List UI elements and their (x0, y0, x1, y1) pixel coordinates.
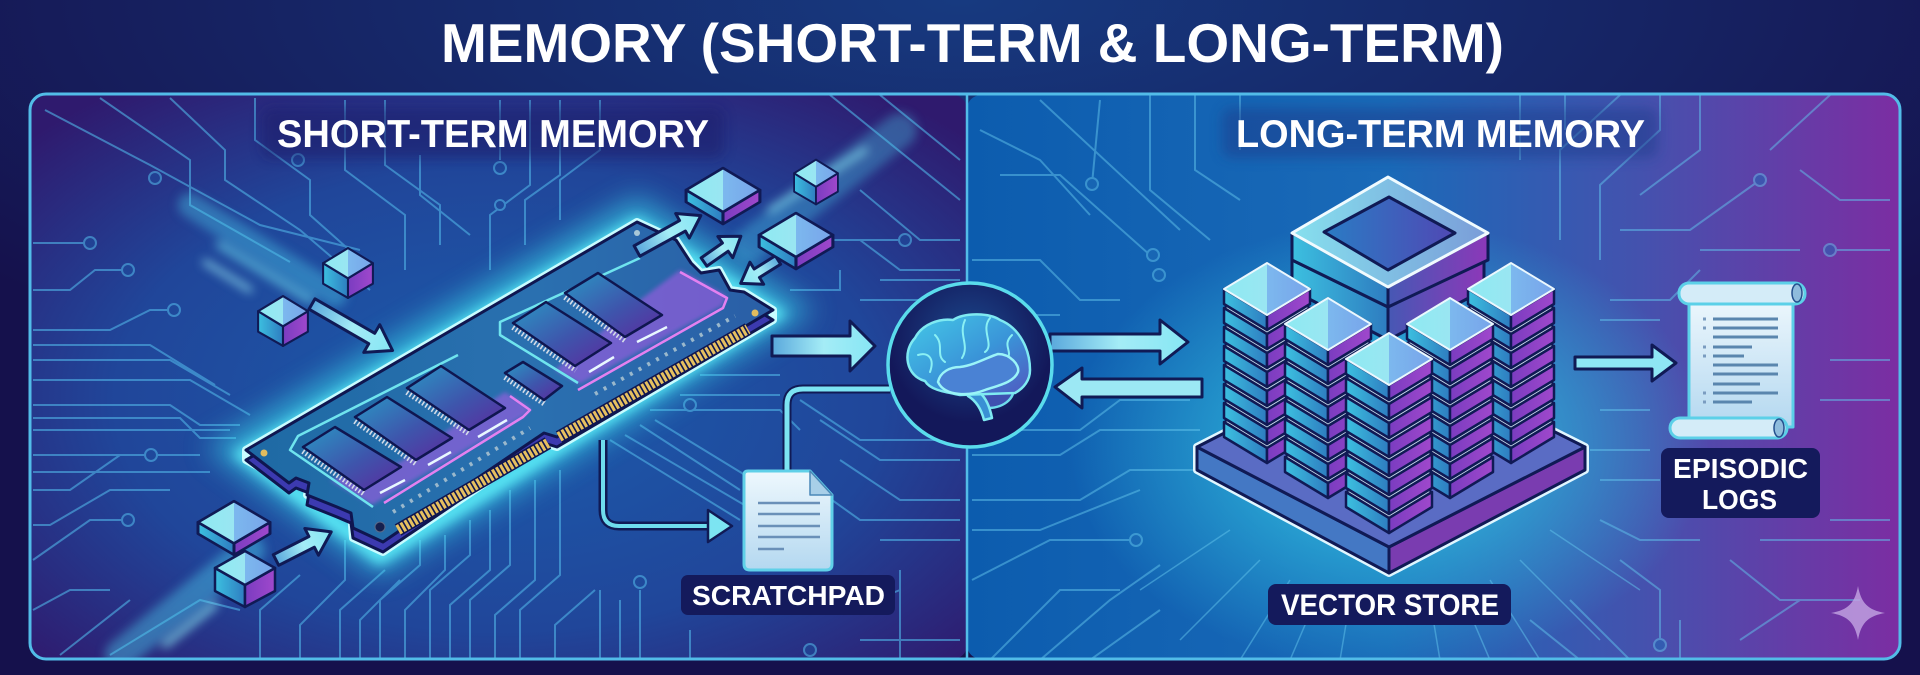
panel: short-term memory (29, 93, 969, 661)
connector: brain to scratchpad (787, 389, 890, 472)
data cubes in (258, 248, 373, 346)
label: vector store: VECTOR STORE (1281, 589, 1499, 622)
title: MEMORY (SHORT-TERM & LONG-TERM) (441, 12, 1504, 74)
memory chips (303, 273, 662, 490)
brain stem (968, 393, 992, 420)
storage column left (1224, 263, 1310, 463)
chip pins (303, 297, 626, 494)
data cubes lower left (198, 501, 275, 607)
RAM module (246, 222, 773, 552)
long-term panel background (967, 93, 1902, 661)
storage column front (1346, 333, 1432, 533)
short-term circuit traces (33, 95, 960, 660)
scroll log lines (1703, 319, 1778, 402)
arrow: data into RAM (308, 297, 394, 354)
panel: long-term memory (967, 93, 1902, 670)
platform (1193, 428, 1589, 577)
brain folds (918, 318, 1012, 372)
long-term circuit traces (972, 95, 1890, 660)
icon: brain hub (888, 283, 1052, 447)
icon: scratchpad document (744, 471, 832, 570)
short-term panel background (29, 93, 969, 661)
icon: episodic logs scroll (1670, 283, 1805, 438)
label: episodic logs: EPISODIC (1673, 453, 1808, 484)
heading: short-term memory: SHORT-TERM MEMORY (277, 113, 709, 156)
gold contacts (398, 329, 748, 530)
tower glow (1094, 250, 1689, 650)
icon: watermark sparkle (1831, 586, 1885, 640)
heading: long-term memory: LONG-TERM MEMORY (1236, 113, 1645, 156)
vector store (1197, 177, 1585, 573)
heading halo (1222, 108, 1658, 158)
board traces (290, 258, 727, 507)
label: scratchpad (681, 575, 895, 615)
arrows: to and from top-right cubes (632, 212, 782, 286)
RAM tight glow (246, 226, 773, 556)
arrow: vector store to logs (1575, 345, 1676, 381)
label: scratchpad: SCRATCHPAD (692, 580, 885, 611)
connector: RAM to scratchpad (603, 440, 732, 542)
arrow: vector store to brain (1055, 368, 1202, 408)
chip glow regions (330, 270, 727, 505)
label: episodic logs: LOGS (1702, 484, 1777, 515)
brain cerebrum (907, 314, 1030, 395)
brain cerebellum (978, 384, 1013, 408)
storage column mid-right (1407, 298, 1493, 498)
arrow: RAM to brain (772, 321, 875, 371)
RAM outer highlight (246, 222, 773, 552)
storage column right (1468, 263, 1554, 463)
data cubes upper right (686, 160, 838, 269)
scroll bottom roll (1670, 418, 1787, 438)
brain temporal lobe (938, 354, 1018, 394)
RAM side thickness (244, 315, 775, 554)
motion streaks (120, 130, 900, 655)
label: episodic logs (1661, 448, 1820, 518)
arrow: cubes to RAM lower (272, 527, 333, 567)
top block (1292, 177, 1488, 340)
RAM wide glow (246, 222, 773, 550)
storage column mid-left (1285, 298, 1371, 498)
RAM circuit board (246, 222, 773, 542)
small components (393, 316, 735, 512)
arrow: brain to vector store (1050, 320, 1188, 364)
mounting holes (260, 230, 758, 532)
heading halo (262, 108, 724, 158)
scroll top roll (1679, 283, 1805, 304)
